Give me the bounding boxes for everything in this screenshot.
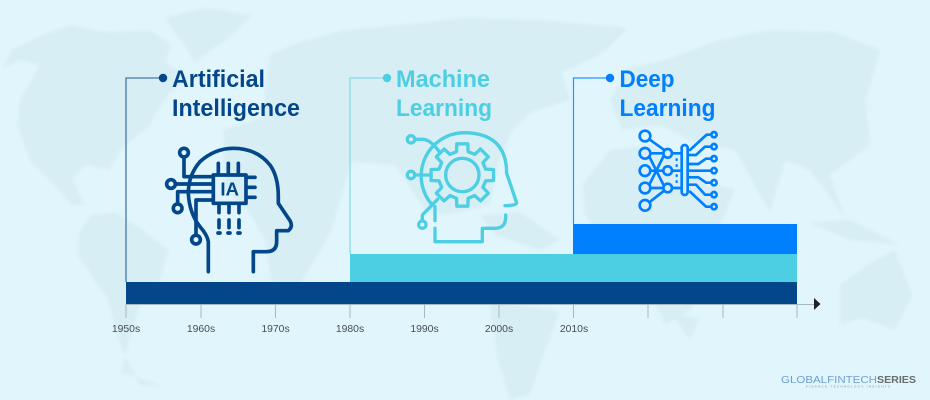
timeline bars (126, 224, 797, 304)
leader: artificial intelligence (126, 74, 167, 282)
axis decade labels (112, 324, 588, 335)
icon: AI head with chip: IA (220, 179, 239, 200)
axis decade labels: 1980s (336, 324, 364, 335)
bar: deep learning (573, 224, 797, 254)
heading: machine learning (396, 66, 492, 122)
axis decade labels: 1960s (187, 324, 215, 335)
icon: deep learning neural network (640, 131, 717, 211)
bar: artificial intelligence (126, 282, 797, 304)
heading: machine learning: Learning (396, 95, 492, 122)
logo: Global Fintech Series (781, 375, 916, 388)
axis decade labels: 2010s (560, 324, 588, 335)
heading: artificial intelligence (172, 66, 300, 122)
heading: artificial intelligence: Artificial (172, 66, 265, 93)
logo: Global Fintech Series: GLOBALFINTECH (781, 375, 877, 386)
axis decade labels: 1950s (112, 324, 140, 335)
icon: AI head with chip (167, 148, 291, 272)
leader: deep learning (574, 74, 614, 224)
heading: artificial intelligence: Intelligence (172, 95, 300, 122)
logo: Global Fintech Series: SERIES (877, 375, 916, 386)
heading: deep learning: Learning (620, 95, 716, 122)
heading: deep learning: Deep (620, 66, 674, 93)
heading: deep learning (620, 66, 716, 122)
axis decade labels: 2000s (485, 324, 513, 335)
heading: machine learning: Machine (396, 66, 490, 93)
leader: machine learning (350, 74, 391, 254)
logo: Global Fintech Series: FINANCE TECHNOLOGY INSIGHTS (806, 384, 890, 388)
axis decade labels: 1990s (410, 324, 439, 335)
icon: ML head with gear (407, 133, 517, 242)
bar: machine learning (350, 254, 797, 282)
axis with ticks (126, 304, 814, 318)
axis decade labels: 1970s (261, 324, 290, 335)
axis arrow (814, 298, 820, 310)
